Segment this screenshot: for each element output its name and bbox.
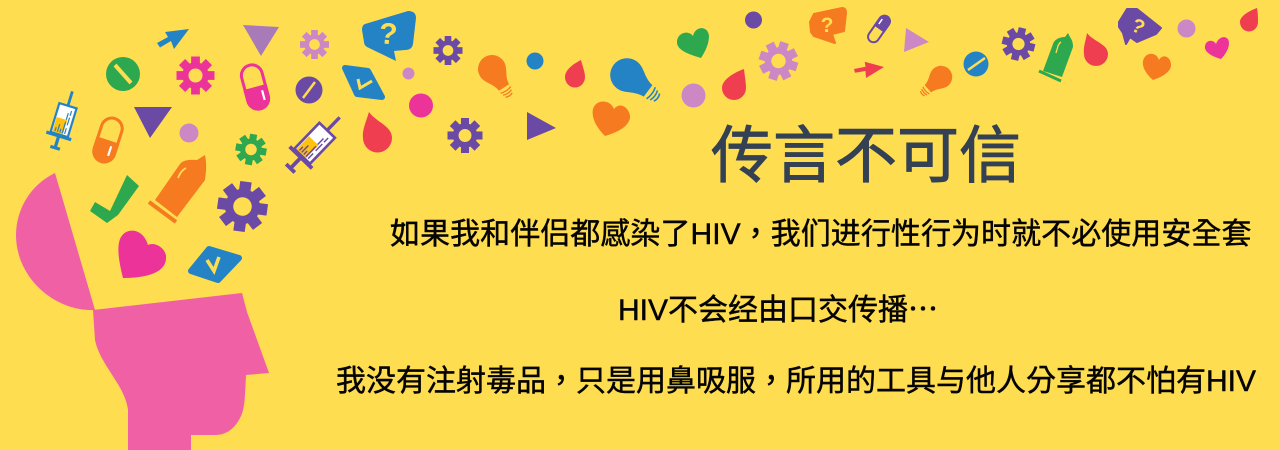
icon: green check	[90, 175, 139, 223]
icon: blue question bubble	[362, 11, 416, 61]
icon: magenta heart right	[1205, 37, 1229, 59]
icon: purple gear right	[998, 24, 1039, 64]
icons rising from head	[43, 8, 1258, 280]
icon: green gear	[233, 132, 269, 167]
icon: orange bulb	[473, 50, 521, 103]
icon: purple question bubble: ?	[1128, 14, 1148, 40]
icon: blue syringe	[43, 88, 85, 152]
icon: green heart	[677, 28, 709, 58]
icon: lilac triangle	[243, 25, 279, 56]
icon: orange condom	[149, 155, 206, 222]
icon: purple pill	[296, 76, 322, 104]
icon: purple question bubble	[1119, 9, 1161, 44]
icon: magenta heart	[118, 231, 166, 278]
icon: blue rhombus lower	[191, 249, 239, 280]
icon: lilac gear	[300, 30, 329, 59]
icon: purple right triangle	[527, 112, 556, 140]
icon: purple gear middle	[448, 118, 482, 153]
icon: orange heart right	[1143, 54, 1171, 80]
icon: lilac right triangle	[904, 28, 929, 52]
icon: lilac gear right	[754, 36, 803, 86]
icon: magenta gear	[176, 56, 214, 94]
icon: orange question bubble	[810, 8, 846, 43]
icon: pink capsule	[238, 62, 273, 113]
icon: purple syringe	[279, 107, 351, 179]
illustration: head with open top	[16, 173, 269, 450]
icon: green condom	[1039, 33, 1073, 81]
icon: orange question bubble: ?	[821, 14, 833, 37]
title: 传言不可信	[711, 122, 1021, 191]
text line: myth two: HIV不会经由口交传播⋯	[618, 294, 938, 327]
icon: blue question bubble: ?	[377, 17, 399, 52]
icon: blue bulb	[603, 51, 668, 112]
icon: purple gear top	[434, 36, 462, 65]
icon: blue pill	[964, 52, 988, 76]
text line: myth one: 如果我和伴侣都感染了HIV，我们进行性行为时就不必使用安全套	[390, 218, 1252, 251]
icon: blue rhombus upper	[345, 68, 382, 97]
icon: orange capsule	[89, 115, 126, 167]
icon: green pill	[106, 57, 140, 91]
icon: purple triangle	[134, 107, 172, 138]
text line: myth three: 我没有注射毒品，只是用鼻吸服，所用的工具与他人分享都不怕有HIV	[336, 365, 1256, 398]
icon: orange bulb right	[914, 61, 957, 102]
icon: purple capsule	[865, 12, 894, 45]
icon: red arrow	[854, 62, 884, 78]
icon: large purple gear	[214, 178, 271, 235]
icon: orange heart	[593, 102, 630, 136]
icon: red drops	[363, 8, 1258, 152]
icon: dots	[180, 12, 1196, 142]
icon: blue arrow	[157, 29, 189, 49]
